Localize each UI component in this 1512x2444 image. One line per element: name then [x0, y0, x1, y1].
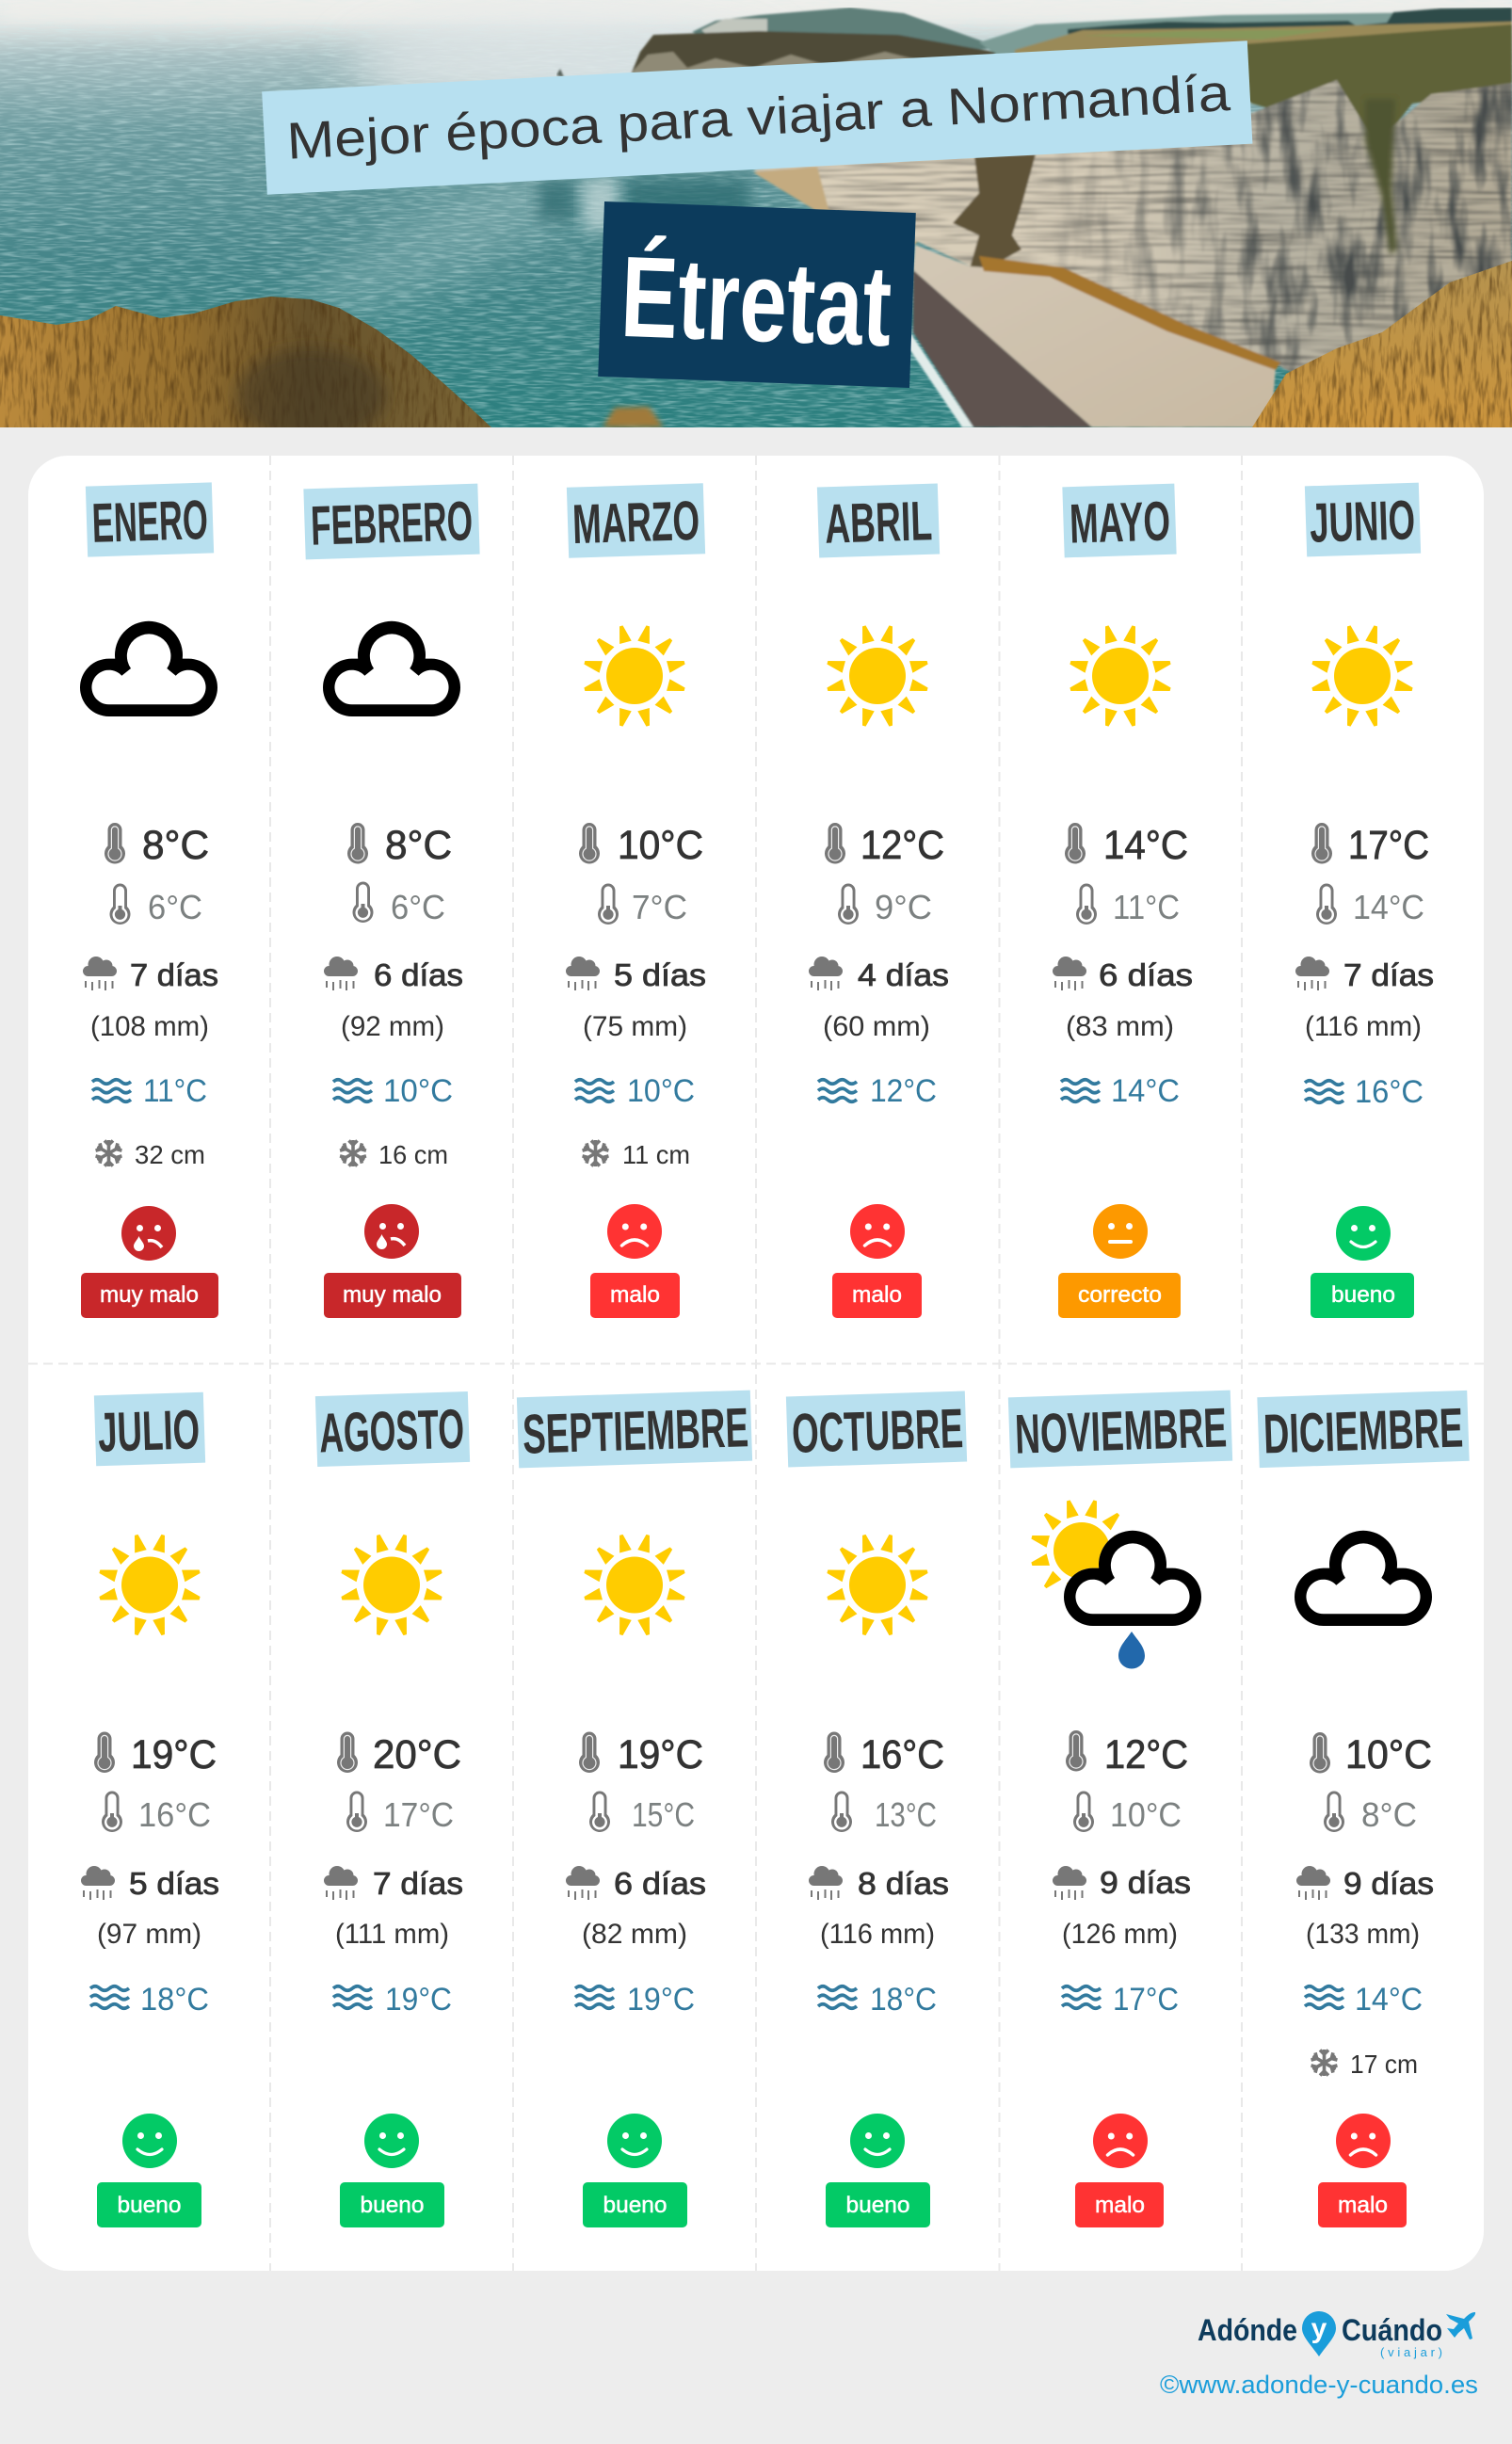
rainfall: (75 mm)	[583, 1011, 687, 1042]
rainy days	[1295, 957, 1434, 992]
sea temperature: 16°C	[1355, 1074, 1424, 1110]
month: octubre	[786, 1391, 967, 2227]
minimum temperature: 8°C	[1361, 1795, 1417, 1834]
month label: MARZO	[571, 490, 700, 555]
minimum temperature: 13°C	[875, 1795, 937, 1834]
weather icon: sun, cloud and rain drop	[1030, 1499, 1201, 1668]
sea temperature: 14°C	[1355, 1982, 1423, 2018]
weather icon: cloud	[323, 621, 460, 716]
rating face	[1336, 2114, 1391, 2168]
rating face	[364, 2114, 419, 2168]
rating badge: malo	[610, 1282, 660, 1308]
rainy days: 5 días	[614, 957, 706, 992]
month: mayo	[1053, 484, 1193, 1318]
weather icon: cloud	[80, 621, 217, 716]
maximum temperature: 8°C	[142, 823, 209, 868]
weather icon: sun	[583, 1534, 686, 1636]
rainfall: (82 mm)	[582, 1919, 687, 1950]
rainy days	[809, 957, 949, 992]
month label: ENERO	[91, 489, 209, 555]
month label	[303, 484, 480, 559]
snowfall: 16 cm	[378, 1140, 448, 1169]
title text: Mejor época para viajar a Normandía	[285, 63, 1231, 170]
weather icon: sun	[340, 1534, 443, 1636]
maximum temperature	[579, 823, 703, 868]
rainfall: (83 mm)	[1066, 1011, 1174, 1042]
minimum temperature	[1073, 1791, 1182, 1834]
rainfall: (116 mm)	[1305, 1011, 1422, 1042]
minimum temperature	[109, 883, 202, 926]
maximum temperature	[1311, 823, 1429, 868]
rainy days	[1053, 957, 1193, 992]
rainfall: (60 mm)	[823, 1011, 930, 1042]
snowfall: 32 cm	[135, 1140, 205, 1169]
rainy days	[324, 1866, 463, 1901]
snowfall	[95, 1140, 205, 1169]
minimum temperature	[346, 1791, 454, 1834]
maximum temperature	[1065, 823, 1188, 868]
logo: Adónde y Cuándo: Adónde	[1198, 2313, 1297, 2347]
rating badge	[81, 1273, 218, 1318]
month: agosto	[315, 1391, 470, 2227]
minimum temperature: 14°C	[1353, 888, 1424, 926]
month label	[1062, 484, 1177, 557]
city name banner: Étretat	[598, 201, 916, 388]
rainy days: 6 días	[374, 957, 463, 992]
rating badge	[583, 2182, 687, 2227]
rating face	[364, 1204, 419, 1259]
month label: ABRIL	[824, 490, 933, 555]
weather icon: sun	[98, 1534, 201, 1636]
minimum temperature: 10°C	[1110, 1795, 1182, 1834]
logo: Adónde y Cuándo: Cuándo	[1342, 2313, 1442, 2347]
sea temperature: 12°C	[870, 1073, 937, 1109]
maximum temperature	[579, 1732, 703, 1777]
sea temperature: 17°C	[1113, 1982, 1179, 2018]
rainy days	[1296, 1866, 1434, 1901]
month label	[817, 484, 940, 557]
sea temperature	[1305, 1074, 1424, 1110]
snowfall	[582, 1140, 690, 1169]
maximum temperature: 14°C	[1103, 823, 1188, 868]
minimum temperature: 7°C	[632, 888, 687, 926]
sea temperature	[575, 1073, 695, 1109]
maximum temperature: 10°C	[618, 823, 703, 868]
maximum temperature	[825, 823, 944, 868]
rainy days: 7 días	[373, 1866, 463, 1901]
rainy days	[81, 1866, 219, 1901]
rainy days: 9 días	[1343, 1866, 1434, 1901]
sea temperature: 14°C	[1111, 1073, 1180, 1109]
rating badge: malo	[1095, 2193, 1145, 2218]
weather icon: cloud	[1295, 1531, 1432, 1626]
rating badge	[590, 1273, 680, 1318]
month label	[86, 482, 214, 557]
minimum temperature: 17°C	[383, 1795, 454, 1834]
rainy days: 4 días	[858, 957, 949, 992]
maximum temperature: 10°C	[1345, 1732, 1432, 1777]
month: noviembre	[1008, 1391, 1232, 2227]
rainy days	[809, 1866, 949, 1901]
rating badge: bueno	[845, 2193, 909, 2218]
rating face	[850, 2114, 905, 2168]
month label: OCTUBRE	[791, 1397, 964, 1465]
sea temperature: 18°C	[140, 1982, 209, 2018]
maximum temperature: 12°C	[1104, 1732, 1188, 1777]
rating badge	[1311, 1273, 1414, 1318]
maximum temperature: 12°C	[861, 823, 944, 868]
month: febrero	[303, 484, 480, 1318]
rating badge	[97, 2182, 201, 2227]
month label: SEPTIEMBRE	[522, 1396, 749, 1466]
rating face	[850, 1204, 905, 1259]
month: julio	[81, 1392, 219, 2227]
maximum temperature: 17°C	[1348, 823, 1429, 868]
website credit: ©www.adonde-y-cuando.es	[1160, 2371, 1478, 2399]
month: enero	[80, 482, 218, 1318]
sea temperature	[575, 1982, 695, 2018]
rating badge: correcto	[1078, 1282, 1162, 1308]
month label: NOVIEMBRE	[1014, 1396, 1228, 1466]
minimum temperature: 9°C	[875, 888, 932, 926]
rainy days: 7 días	[1343, 957, 1434, 992]
minimum temperature	[102, 1791, 211, 1834]
city name: Étretat	[619, 233, 893, 370]
minimum temperature: 6°C	[148, 888, 202, 926]
month label: JUNIO	[1309, 489, 1416, 555]
rainfall: (116 mm)	[820, 1919, 935, 1950]
rainy days	[83, 957, 218, 992]
rating badge	[826, 2182, 930, 2227]
rating badge: bueno	[360, 2193, 424, 2218]
rainy days: 6 días	[614, 1866, 706, 1901]
rating badge: muy malo	[343, 1282, 442, 1308]
snowfall: 17 cm	[1350, 2050, 1418, 2079]
month: diciembre	[1257, 1391, 1470, 2227]
maximum temperature	[337, 1732, 461, 1777]
maximum temperature	[105, 823, 209, 868]
rating badge: malo	[852, 1282, 902, 1308]
rating badge	[1075, 2182, 1164, 2227]
minimum temperature: 15°C	[632, 1795, 695, 1834]
rainy days	[566, 1866, 706, 1901]
rainfall: (108 mm)	[90, 1011, 209, 1042]
month label	[517, 1391, 752, 1468]
snowfall	[1311, 2050, 1418, 2079]
maximum temperature: 20°C	[373, 1732, 461, 1777]
month label: JULIO	[97, 1398, 201, 1464]
weather icon: sun	[1069, 624, 1172, 728]
rating face	[1093, 2114, 1148, 2168]
sea temperature	[818, 1982, 937, 2018]
rating face	[1336, 1206, 1391, 1261]
title banner	[262, 40, 1252, 195]
rating badge: muy malo	[100, 1282, 199, 1308]
maximum temperature	[824, 1732, 944, 1777]
rainy days: 6 días	[1099, 957, 1193, 992]
minimum temperature	[589, 1791, 695, 1834]
month label: AGOSTO	[318, 1398, 465, 1464]
sea temperature	[1061, 1073, 1180, 1109]
month: marzo	[566, 483, 706, 1318]
month label	[94, 1392, 205, 1466]
minimum temperature: 11°C	[1113, 888, 1180, 926]
rainfall: (92 mm)	[341, 1011, 444, 1042]
rainy days	[566, 957, 706, 992]
rainy days	[1053, 1865, 1191, 1900]
rainfall: (126 mm)	[1062, 1919, 1178, 1950]
sea temperature	[818, 1073, 937, 1109]
minimum temperature	[831, 1791, 937, 1834]
icon: plane	[1446, 2312, 1475, 2339]
sea temperature	[1062, 1982, 1179, 2018]
month: abril	[809, 484, 949, 1318]
rainy days: 7 días	[130, 957, 218, 992]
rating face	[607, 2114, 662, 2168]
rating face	[121, 1206, 176, 1261]
sea temperature	[333, 1073, 453, 1109]
month label	[567, 483, 705, 558]
maximum temperature: 19°C	[618, 1732, 703, 1777]
minimum temperature: 16°C	[138, 1795, 211, 1834]
panel: monthly climate card	[28, 456, 1484, 2271]
snowfall: 11 cm	[622, 1140, 690, 1169]
maximum temperature	[347, 823, 452, 868]
sea temperature	[333, 1982, 452, 2018]
month label: FEBRERO	[310, 490, 474, 557]
weather icon: sun	[826, 624, 929, 728]
rainy days: 8 días	[858, 1866, 949, 1901]
maximum temperature: 19°C	[131, 1732, 217, 1777]
rainfall: (111 mm)	[335, 1919, 449, 1950]
sea temperature: 19°C	[385, 1982, 452, 2018]
rating badge	[832, 1273, 922, 1318]
sea temperature: 10°C	[627, 1073, 695, 1109]
rainfall: (97 mm)	[97, 1919, 201, 1950]
sea temperature: 10°C	[383, 1073, 453, 1109]
sea temperature	[1305, 1982, 1423, 2018]
hero photo: Étretat cliffs and sea	[0, 0, 1512, 442]
logo: Adónde y Cuándo: (viajar)	[1380, 2345, 1442, 2359]
maximum temperature	[1066, 1730, 1188, 1777]
month label	[1008, 1391, 1232, 1468]
rating badge: malo	[1338, 2193, 1388, 2218]
minimum temperature	[352, 881, 445, 926]
sea temperature	[92, 1073, 207, 1109]
sea temperature: 19°C	[627, 1982, 695, 2018]
snowfall	[340, 1140, 448, 1169]
sea temperature: 18°C	[870, 1982, 937, 2018]
sea temperature	[90, 1982, 209, 2018]
rating badge	[340, 2182, 444, 2227]
rating face	[607, 1204, 662, 1259]
month label	[1305, 483, 1421, 556]
minimum temperature	[598, 883, 687, 926]
minimum temperature	[1324, 1791, 1417, 1834]
weather icon: sun	[583, 624, 686, 728]
minimum temperature	[1316, 883, 1424, 926]
month label: MAYO	[1069, 490, 1171, 555]
rainfall: (133 mm)	[1306, 1919, 1420, 1950]
rainy days: 5 días	[129, 1866, 219, 1901]
minimum temperature: 6°C	[391, 888, 445, 926]
maximum temperature	[94, 1732, 217, 1777]
rating badge: bueno	[117, 2193, 181, 2218]
icon: map pin	[1302, 2311, 1336, 2356]
rating face	[1093, 1204, 1148, 1259]
rating badge	[1318, 2182, 1407, 2227]
rainy days	[324, 957, 463, 992]
month: septiembre	[517, 1391, 752, 2227]
rainy days: 9 días	[1100, 1865, 1191, 1900]
maximum temperature	[1310, 1732, 1432, 1777]
rating badge	[1058, 1273, 1181, 1318]
logo: Adónde y Cuándo	[1198, 2311, 1475, 2359]
sea temperature: 11°C	[143, 1073, 207, 1109]
month label	[786, 1391, 967, 1467]
rating face	[122, 2114, 177, 2168]
month label	[315, 1391, 470, 1467]
minimum temperature	[838, 883, 932, 926]
maximum temperature: 16°C	[861, 1732, 944, 1777]
weather icon: sun	[826, 1534, 929, 1636]
month: junio	[1295, 483, 1434, 1318]
rating badge	[324, 1273, 461, 1318]
maximum temperature: 8°C	[385, 823, 452, 868]
weather icon: sun	[1311, 624, 1414, 728]
minimum temperature	[1076, 883, 1180, 926]
icon: map pin: y	[1311, 2313, 1327, 2344]
rating badge: bueno	[603, 2193, 667, 2218]
rating badge: bueno	[1331, 1282, 1395, 1308]
